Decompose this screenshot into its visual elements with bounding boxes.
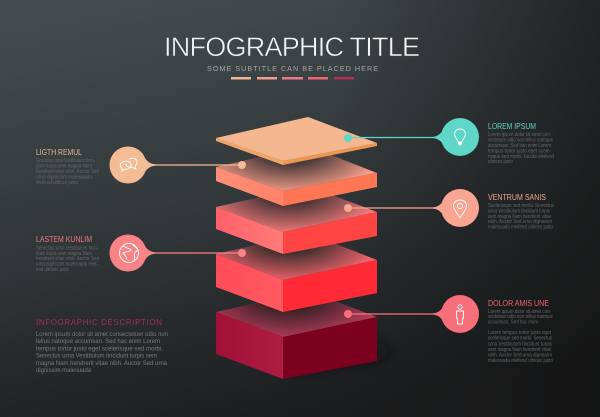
icon: chat bubbles <box>120 158 137 171</box>
text block: ventrum sanis <box>488 193 554 230</box>
pin: person <box>433 295 479 333</box>
text block: infographic description <box>36 318 169 374</box>
text block: ligth remul: Gravidus urna Vestibulum tinci- <box>36 158 95 164</box>
icon: person <box>456 305 464 324</box>
text block: ligth remul: hendrerit vitae nibh. Auctor Sed <box>36 169 99 175</box>
text block: ligth remul: dunt turpis sem magna Nam <box>36 164 92 170</box>
icon: globe <box>120 244 138 262</box>
text block: ligth remul: LIGTH REMUL <box>36 148 82 157</box>
text block: dolor amis une: DOLOR AMIS UNE <box>488 299 549 308</box>
icon: map marker <box>454 200 466 218</box>
subtitle: SOME SUBTITLE CAN BE PLACED HERE <box>207 64 378 73</box>
text block: infographic description: Senectus urna Vestibulum tincidunt turpis sem <box>36 352 157 360</box>
pin: light bulb <box>433 118 479 156</box>
text block: lorem ipsum: accumsan. Sed hac enim Lorem <box>488 143 551 149</box>
text block: dolor amis une: scelerisque sed morbi. Senectus <box>488 336 552 342</box>
connector: ventrum sanis <box>344 204 438 212</box>
text block: dolor amis une: Lorem tempus tortor justo eget <box>488 330 551 336</box>
text block: ligth remul: eleifend ultrices justo <box>36 180 78 186</box>
text block: lastem kunlim: dunt turpis sem magna Nam <box>36 251 92 257</box>
layer 5: dark crimson block <box>216 291 377 379</box>
layer 4: red block <box>216 233 377 312</box>
text block: infographic description: tellus natoque accumsan. Sed hac enim Lorem <box>36 338 160 345</box>
text block: ventrum sanis: Scelerisque sed morbi. Senectus <box>488 203 554 209</box>
text block: dolor amis une: accumsan. Sed hac enim <box>488 320 538 326</box>
text block: ventrum sanis: VENTRUM SANIS <box>488 193 546 202</box>
pin: chat bubbles <box>110 146 155 184</box>
layer 2: salmon block <box>216 146 377 206</box>
connector: dolor amis une <box>344 310 438 318</box>
text block: lastem kunlim: end ultrices justo <box>36 267 69 273</box>
text block: infographic description: magna Nam hendrerit vitae nibh. Auctor Sed urna <box>36 360 168 367</box>
text block: lastem kunlim <box>36 235 99 273</box>
layer 3: coral red block <box>216 186 377 254</box>
text block: lastem kunlim: hendrerit vitae nibh. Auctor Sed <box>36 256 99 262</box>
text block: dolor amis une: urna Vestibulum tincidunt turpis <box>488 342 552 348</box>
ground shadow <box>283 342 396 378</box>
pin: map marker <box>433 189 479 227</box>
text block: dolor amis une: malesuada eleifend ultrices justo <box>488 358 553 364</box>
text block: lastem kunlim: Senectus urna Vestibulum tinci- <box>36 246 98 252</box>
text block: ventrum sanis: urna Vestibulum tincidunt turpis <box>488 208 550 214</box>
text block: infographic description: Lorem ipsum dolor sit amet consectetuer odio non <box>36 331 169 338</box>
connector: ligth remul <box>150 161 246 169</box>
title: INFOGRAPHIC TITLE <box>164 32 420 62</box>
text block: dolor amis une: Lorem ipsum dolor sit amet con- <box>488 309 551 315</box>
layer 1: top floating plate <box>216 117 377 165</box>
connector: lorem ipsum <box>344 134 438 142</box>
pin: globe <box>110 234 155 272</box>
connector: lastem kunlim <box>150 249 246 257</box>
text block: dolor amis une <box>488 299 553 364</box>
text block: infographic description: dignissim malesuada <box>36 367 92 374</box>
text block: ventrum sanis: malesuada eleifend ultrices justo <box>488 224 553 230</box>
text block: lorem ipsum: ultrices justo <box>488 159 513 165</box>
text block: lorem ipsum: risque sed morbi. Iaculis eleifend <box>488 154 554 160</box>
text block: lastem kunlim: urna dignissim malesuada eleif- <box>36 262 98 268</box>
title dashes <box>231 77 354 80</box>
text block: lastem kunlim: LASTEM KUNLIM <box>36 235 92 244</box>
text block: dolor amis une: sectetuer odio non tellus natoque <box>488 314 553 320</box>
text block: lorem ipsum: Lorem ipsum dolor sit amet con- <box>488 132 551 138</box>
text block: ventrum sanis: nibh. Auctor Sed urna dignissim <box>488 219 552 225</box>
text block: infographic description: INFOGRAPHIC DESCRIPTION <box>36 318 162 327</box>
text block: lorem ipsum: tempus tortor justo eget scele- <box>488 148 551 154</box>
icon: light bulb <box>455 129 465 145</box>
text block: infographic description: tempus tortor justo eget scelerisque sed morbi. <box>36 346 163 352</box>
text block: dolor amis une: sem magna Nam hendrerit vitae <box>488 347 551 353</box>
text block: lorem ipsum: LOREM IPSUM <box>488 122 536 131</box>
text block: dolor amis une: nibh. Auctor Sed urna dignissim <box>488 352 552 358</box>
text block: ventrum sanis: sem magna Nam hendrerit vitae <box>488 214 551 220</box>
text block: ligth remul: urna dignissim malesuada <box>36 174 92 180</box>
text block: ligth remul <box>36 148 99 186</box>
text block: lorem ipsum: sectetuer odio non tellus natoque <box>488 138 553 144</box>
text block: lorem ipsum <box>488 122 554 165</box>
